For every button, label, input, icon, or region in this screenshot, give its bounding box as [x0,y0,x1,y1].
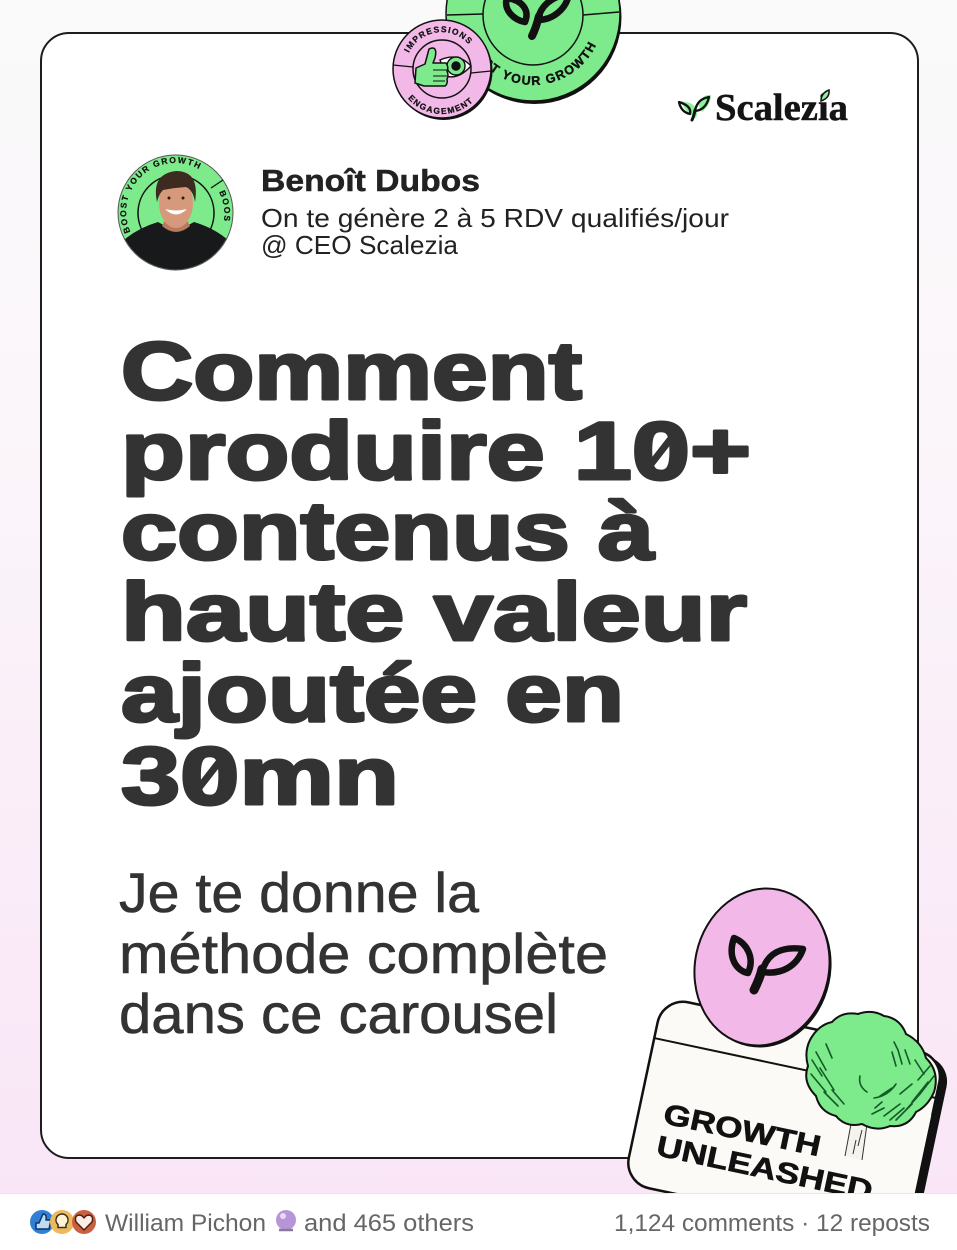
icon: logo sprout [679,95,711,120]
subtitle: Je te donne la [119,861,480,924]
author headline: On te génère 2 à 5 RDV qualifiés/jour [261,203,729,233]
photo: portrait [124,171,228,275]
icon: thumb up [415,48,448,86]
icon: sprout [506,0,569,36]
subtitle [119,861,608,1045]
sticker text: GROWTH [661,1099,824,1163]
title: haute valeur [121,567,747,658]
icon: eye [440,57,471,77]
curved label: BOOST YOUR GROWTH [120,156,201,234]
title: Comment [121,326,582,417]
author role: @ CEO Scalezia [261,230,459,260]
curved label: BOOST YOUR GROWTH [491,42,596,86]
foliage [806,1012,936,1129]
title: ajoutée en [121,648,624,739]
icon: like reaction [30,1210,54,1234]
title: 30mn [121,731,399,822]
author block [261,163,729,260]
icon: love reaction [72,1210,96,1234]
sticker: pink sprout coin [680,876,846,1060]
logo: Scalezia: Scalezia [715,87,848,129]
reactions count: and 465 others [304,1210,474,1237]
title: contenus à [121,486,654,577]
sticker text: UNLEASHED [654,1131,875,1208]
title [121,326,751,822]
reactions text: William Pichon [105,1210,266,1237]
avatar [118,154,234,270]
badge: impressions engagement [392,19,492,120]
sticker text [654,1099,875,1208]
author name: Benoît Dubos [261,163,480,198]
curved label: engagement: ENGAGEMENT [408,94,472,114]
comments and reposts: 1,124 comments · 12 reposts [614,1210,930,1237]
subtitle: dans ce carousel [119,982,558,1045]
icon: sprout [732,938,803,990]
badge: boost your growth [445,0,622,104]
illustration: tree [806,1012,936,1160]
icon: crystal ball [276,1210,296,1230]
avatar: BOOS [219,190,230,221]
title: produire 10+ [121,406,751,497]
icon: insight reaction [50,1210,74,1234]
sticker: growth unleashed card [614,997,953,1250]
curved label: impressions: IMPRESSIONS [404,26,472,53]
icon: leaf accent [821,90,829,101]
subtitle: méthode complète [119,922,608,985]
footer bar [0,1193,957,1250]
trunk [845,1124,867,1160]
foliage hatching [811,1042,934,1120]
